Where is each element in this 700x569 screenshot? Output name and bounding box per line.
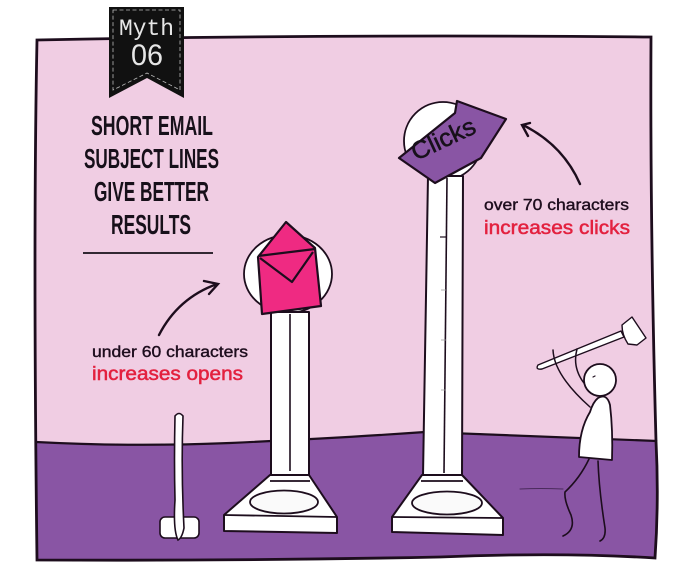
title: short email subject lines give better results: GIVE BETTER bbox=[94, 176, 209, 207]
short tower bell bbox=[244, 235, 332, 313]
short tower column bbox=[271, 312, 309, 476]
callout: over 70 characters bbox=[484, 197, 630, 239]
tall tower bell bbox=[404, 102, 482, 180]
tall tower base bbox=[392, 475, 503, 535]
title: short email subject lines give better results bbox=[84, 110, 219, 240]
tall tower column bbox=[423, 176, 463, 476]
title: short email subject lines give better results: SUBJECT LINES bbox=[84, 143, 219, 174]
high striker: tall tower with clicks sign bbox=[392, 101, 506, 535]
callout: under 60 characters bbox=[92, 344, 248, 385]
arrow to envelope bbox=[159, 281, 218, 335]
high striker: short tower with envelope bbox=[224, 222, 337, 533]
icon: pink envelope bbox=[258, 222, 321, 314]
title: short email subject lines give better results: RESULTS bbox=[111, 209, 191, 240]
callout: over 70 characters: increases clicks bbox=[484, 218, 630, 239]
floor horizon line bbox=[36, 432, 657, 445]
legs bbox=[563, 459, 605, 541]
myth banner: Myth bbox=[119, 16, 174, 42]
callout: under 60 characters: under 60 characters bbox=[92, 344, 248, 361]
arrow to clicks sign bbox=[522, 123, 580, 184]
hammer bbox=[537, 331, 624, 369]
icon: spare mallet on the floor bbox=[160, 414, 199, 540]
panel: purple floor bbox=[36, 432, 658, 560]
clicks label: Clicks bbox=[407, 112, 480, 166]
myth banner bbox=[109, 7, 184, 98]
callout: over 70 characters: over 70 characters bbox=[484, 197, 629, 214]
callout: under 60 characters: increases opens bbox=[92, 364, 243, 385]
panel: pink wall background bbox=[35, 36, 656, 444]
head bbox=[584, 364, 616, 396]
body bbox=[579, 397, 612, 460]
myth banner: 06 bbox=[131, 39, 163, 72]
short tower base bbox=[224, 475, 337, 533]
shadow streak bbox=[520, 488, 563, 490]
icon: purple clicks sign bbox=[399, 101, 506, 183]
arms bbox=[553, 349, 597, 407]
figure swinging a hammer bbox=[520, 317, 646, 541]
title: short email subject lines give better results: SHORT EMAIL bbox=[91, 110, 213, 141]
